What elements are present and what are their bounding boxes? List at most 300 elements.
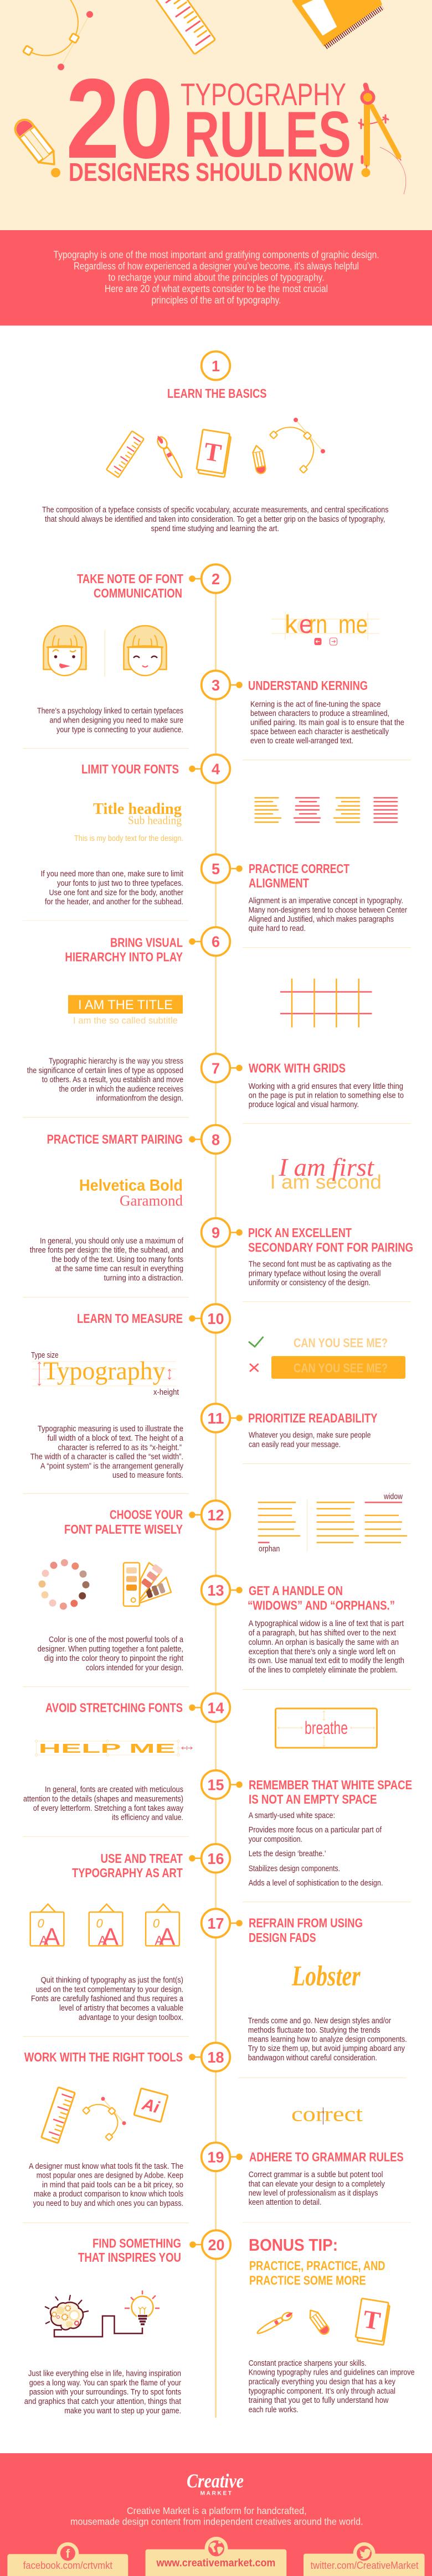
body text [249, 2359, 415, 2414]
body text [249, 1082, 404, 1109]
number badge 18 [189, 2043, 230, 2071]
body text: methods fluctuate too. Studying the trends [248, 2026, 380, 2035]
heading: REFRAIN FROM USING [249, 1916, 363, 1930]
body text [249, 2170, 385, 2207]
icon: framed type 3: A [159, 1923, 176, 1951]
body text: primary typeface without losing the overall [249, 1269, 381, 1279]
number badge 6: 6 [212, 933, 220, 951]
number badge 13: 13 [207, 1582, 224, 1599]
font sample: Title heading [93, 800, 182, 818]
number badge 12: 12 [207, 1507, 224, 1524]
body text: If you need more than one, make sure to limit [41, 869, 184, 879]
body text: and graphics that catch your attention, things that [24, 2397, 182, 2406]
measure diagram: x-height [153, 1388, 179, 1397]
panel: introduction band: to recharge your mind about the principles of typography. [109, 272, 325, 283]
number badge 14 [189, 1694, 230, 1722]
panel: rule 16 typography as art [23, 1844, 230, 2037]
body text: its own. Use manual text edit to modify the length [249, 1656, 404, 1665]
body text: A smartly-used white space: [249, 1811, 335, 1820]
body text: exception that there’s only a single word left on [249, 1647, 395, 1656]
breathe illustration [276, 1708, 377, 1748]
body text [31, 1976, 184, 2022]
body text: in mind that paid tools can be a bit pricey, so [42, 2180, 183, 2190]
heading: BONUS TIP: [249, 2235, 338, 2255]
body text [250, 699, 404, 746]
panel: rule 13 widows and orphans [202, 1492, 411, 1690]
colour wheel [39, 1559, 90, 1610]
measure diagram [31, 1351, 179, 1397]
heading: THAT INSPIRES YOU [78, 2250, 181, 2265]
card: facebook [7, 2542, 128, 2576]
body text [248, 2016, 407, 2063]
body text: and when designing you need to make sure [50, 716, 183, 725]
number badge 19: 19 [207, 2148, 224, 2165]
panel: rule 8 smart pairing [23, 1125, 230, 1297]
number badge 18: 18 [207, 2049, 224, 2066]
body text: the significance of certain lines of type as opposed [27, 1066, 183, 1076]
body text: at the same time can result in everything [55, 1264, 183, 1274]
body text: Color is one of the most powerful tools of a [49, 1635, 184, 1644]
widow and orphan diagram: widow [383, 1492, 403, 1502]
panel: rule 2 font communication [23, 564, 230, 749]
body text: Constant practice sharpens your skills. [249, 2359, 367, 2368]
icon: framed type 3: A [155, 1933, 163, 1949]
kerning illustration: rn [309, 610, 327, 638]
body text: attention to the details (shapes and measurements) [23, 1794, 183, 1804]
number badge 19 [202, 2143, 243, 2171]
pairing sample [270, 1153, 382, 1193]
body text: of the lines to completely eliminate the problem. [249, 1665, 398, 1675]
number badge 7: 7 [212, 1060, 220, 1077]
heading: GET A HANDLE ON [249, 1583, 343, 1598]
body text: most popular ones are designed by Adobe. Keep [37, 2171, 183, 2180]
body text: you need to buy and which ones you can bypass. [33, 2199, 183, 2208]
card: twitter: twitter.com/CreativeMarket [311, 2560, 419, 2571]
heading: LEARN TO MEASURE [77, 1311, 183, 1326]
body text: of a paragraph, but has shifted over to the next [249, 1628, 397, 1638]
heading: PRACTICE CORRECT [249, 861, 349, 876]
number badge 2: 2 [212, 570, 220, 588]
measure diagram: Type size [31, 1351, 59, 1360]
body text: spend time studying and learning the art. [151, 524, 279, 533]
icon: frowning face [43, 626, 86, 676]
body text: Correct grammar is a subtle but potent tool [249, 2170, 383, 2179]
body text: training that you get to fully understand how [249, 2396, 389, 2405]
body text: Fonts are carefully fashioned and thus requires a [31, 1994, 184, 2003]
body text: that can elevate your design to a completely [249, 2179, 385, 2189]
body text: Trends come and go. New design styles and/or [248, 2016, 391, 2026]
body text: column. An orphan is basically the same with an [249, 1638, 399, 1647]
readability sample: CAN YOU SEE ME? [294, 1336, 388, 1350]
card: website [146, 2537, 286, 2576]
number badge 12 [189, 1500, 230, 1529]
number badge 5 [202, 854, 243, 883]
card: website: www.creativemarket.com [156, 2557, 275, 2569]
body text [24, 2369, 182, 2416]
body text: Kerning is the act of fine-tuning the space [250, 699, 381, 709]
logo: MARKET [200, 2491, 232, 2496]
number badge 4 [189, 755, 230, 783]
body text: used to measure fonts. [112, 1471, 183, 1480]
body text: between characters to produce a streamlined, [250, 709, 389, 718]
body text: three fonts per design: the title, the subhead, and [30, 1245, 183, 1255]
heading: WORK WITH GRIDS [249, 1061, 346, 1076]
font sample: This is my body text for the design. [74, 834, 183, 843]
body text: for the header, and another for the subhead. [45, 897, 183, 907]
title: DESIGNERS SHOULD KNOW [69, 158, 353, 186]
heading [249, 1916, 363, 1945]
panel: introduction band: Regardless of how experienced a designer you’ve become, it’s always helpful [74, 261, 359, 272]
icon: framed type 2 [89, 1904, 122, 1951]
body text: space between each character is aesthetically [250, 727, 389, 736]
heading [72, 1851, 183, 1880]
widow and orphan diagram: orphan [259, 1544, 280, 1554]
body text: each rule works. [249, 2405, 299, 2414]
body text [249, 896, 407, 933]
panel: rule 15 white space [202, 1708, 412, 1902]
icon: type book: T [361, 2304, 382, 2335]
body text: designer. When putting together a font palette, [38, 1644, 183, 1654]
body text [30, 1424, 184, 1480]
heading: LIMIT YOUR FONTS [81, 762, 179, 776]
lobster font sample: Lobster [291, 1961, 361, 1992]
hierarchy sample: I am the so called subtitle [73, 1015, 178, 1026]
number badge 15 [202, 1770, 243, 1799]
title [66, 55, 353, 186]
subheading: PRACTICE, PRACTICE, AND [249, 2258, 385, 2273]
body text [38, 1635, 184, 1673]
panel: introduction band: Here are 20 of what experts consider to be the most crucial [105, 283, 328, 294]
icon: ruler [152, 0, 215, 54]
hierarchy sample: I AM THE TITLE [78, 998, 173, 1012]
body text: even to create well-arranged text. [250, 736, 353, 746]
body text [37, 706, 183, 735]
body text: turning into a distraction. [104, 1274, 183, 1283]
number badge 11 [202, 1404, 243, 1432]
body text: Use one font and size for the body, another [49, 888, 183, 897]
measure diagram: Typography [43, 1357, 166, 1385]
body text: to others. As a result, you establish and move [42, 1075, 183, 1084]
number badge 3: 3 [212, 677, 220, 694]
icon: framed type 3: 0 [153, 1917, 160, 1930]
body text: uniformity or consistency of the design. [249, 1278, 371, 1287]
heading: FONT PALETTE WISELY [64, 1522, 183, 1536]
icon: framed type 2: 0 [96, 1917, 103, 1930]
stretched text sample [35, 1740, 192, 1756]
number badge 16 [189, 1844, 230, 1873]
body text: typographic component. It’s only through actual [249, 2386, 395, 2396]
body text: full width of a block of text. The height of a [48, 1434, 184, 1443]
pairing sample [79, 1177, 183, 1209]
number badge 10: 10 [207, 1310, 224, 1327]
heading [249, 861, 349, 890]
number badge 6 [189, 927, 230, 955]
heading [78, 2236, 181, 2265]
panel: header [0, 0, 432, 230]
panel: introduction band [0, 230, 432, 325]
icon: type book [196, 429, 232, 477]
number badge 9: 9 [212, 1224, 220, 1242]
number badge 8 [189, 1125, 230, 1154]
number badge 1: 1 [212, 357, 220, 375]
number badge 15: 15 [207, 1777, 224, 1794]
icon: paintbrush [256, 2310, 295, 2336]
font sample [74, 800, 183, 843]
breathe illustration: breathe [305, 1718, 348, 1738]
icon: illustrator [134, 2088, 168, 2122]
readability sample: CAN YOU SEE ME? [294, 1361, 388, 1375]
icon: illustrator: Ai [140, 2095, 162, 2117]
panel: rule 20 inspiration [24, 2230, 230, 2416]
kerning illustration: e [296, 610, 311, 638]
icon: framed type 1 [30, 1904, 64, 1951]
body text [249, 1811, 383, 1888]
icon: pencil [12, 116, 60, 171]
heading [65, 935, 183, 964]
heading: USE AND TREAT [101, 1851, 183, 1866]
body text: A “point system” is the arrangement generally [40, 1461, 183, 1471]
kerning illustration: k [285, 610, 298, 638]
panel: introduction band: principles of the art of typography. [152, 294, 281, 305]
heading [249, 1778, 412, 1806]
panel: footer [0, 2453, 432, 2576]
pairing sample: Garamond [120, 1192, 183, 1209]
body text [41, 869, 184, 907]
pairing sample: I am first [278, 1153, 374, 1181]
body text: Alignment is an imperative concept in typography. [249, 896, 403, 905]
icon: framed type 1: A [39, 1933, 48, 1949]
kerning illustration: me [338, 610, 368, 638]
number badge 11: 11 [207, 1410, 224, 1427]
icon: paintbrush [155, 433, 185, 480]
card: twitter [304, 2542, 425, 2576]
number badge 3 [202, 671, 243, 699]
panel: rule 9 secondary font [202, 1153, 413, 1302]
panel: rule 1 learn the basics [42, 351, 389, 533]
body text: Working with a grid ensures that every little thing [249, 1082, 403, 1091]
body text: produce logical and visual harmony. [249, 1100, 359, 1109]
number badge 9 [202, 1218, 243, 1247]
panel: introduction band: Typography is one of the most important and gratifying components of graphic design. [53, 249, 379, 260]
kerning illustration [271, 610, 379, 645]
number badge 20: 20 [208, 2236, 225, 2253]
number badge 5: 5 [212, 860, 220, 877]
icon: framed type 2: A [102, 1923, 119, 1951]
panel: rule 7 work with grids [202, 979, 411, 1124]
body text [27, 1057, 183, 1103]
heading: PICK AN EXCELLENT [248, 1225, 352, 1240]
number badge 8: 8 [212, 1131, 220, 1148]
card: facebook: facebook.com/crtvmkt [23, 2560, 112, 2571]
body text: its efficiency and value. [112, 1812, 183, 1822]
body text [249, 1619, 404, 1675]
body text: of every letterform. Stretching a font takes away [33, 1804, 183, 1813]
widow and orphan diagram [258, 1492, 407, 1554]
body text: In general, fonts are created with meticulous [45, 1785, 183, 1794]
heading: CHOOSE YOUR [110, 1508, 183, 1522]
icon: type book: T [202, 437, 223, 468]
alignment icons [255, 798, 397, 822]
panel: rule 10 learn to measure [23, 1304, 230, 1494]
font sample: Sub heading [128, 814, 182, 827]
heading: PRIORITIZE READABILITY [248, 1411, 378, 1425]
card: facebook: f [66, 2547, 70, 2561]
number badge 14: 14 [207, 1699, 224, 1716]
body text: your fonts to just two to three typefaces. [57, 879, 183, 888]
heading: UNDERSTAND KERNING [248, 678, 368, 693]
body text: the body of the text. Using too many fonts [52, 1255, 183, 1264]
footer description [70, 2505, 363, 2527]
heading: IS NOT AN EMPTY SPACE [249, 1792, 377, 1806]
icon: compass [359, 85, 406, 194]
pairing sample: Helvetica Bold [79, 1177, 183, 1194]
heading [77, 572, 183, 600]
divider [104, 630, 105, 677]
readability sample [249, 1336, 405, 1379]
body text: character is referred to as its “x-height.” [58, 1443, 182, 1452]
body text [23, 1785, 183, 1822]
body text: A designer must know what tools fit the task. The [29, 2162, 183, 2171]
panel: rule 12 font palette [23, 1500, 230, 1687]
number badge 17 [202, 1909, 243, 1938]
number badge 13 [202, 1576, 243, 1604]
body text: The second font must be as captivating as the [249, 1260, 392, 1269]
footer description: Creative Market is a platform for handcrafted, [127, 2505, 307, 2516]
heading [248, 1583, 395, 1612]
heading: PRACTICE SMART PAIRING [47, 1132, 183, 1146]
icon: bezier curve [83, 2097, 126, 2141]
correct word sample: correct [291, 2102, 363, 2126]
heading: “WIDOWS” AND “ORPHANS.” [248, 1598, 395, 1612]
body text: Aligned and Justified, which makes paragraphs [249, 915, 394, 924]
body text: practically everything you design that has a key [249, 2377, 395, 2387]
subheading: PRACTICE SOME MORE [249, 2273, 366, 2288]
body text: Lets the design ‘breathe.’ [249, 1849, 326, 1858]
body text [29, 2162, 183, 2208]
icon: ruler [106, 431, 144, 477]
icon: bezier curve [270, 418, 325, 473]
body text [42, 505, 389, 533]
body text: Stabilizes design components. [249, 1864, 340, 1873]
body text [249, 1431, 371, 1450]
body text: Just like everything else in life, having inspiration [28, 2369, 181, 2378]
icon: pencil [251, 445, 266, 474]
body text: on the page is put in relation to something else to [249, 1091, 404, 1100]
body text: In general, you should only use a maximum of [40, 1237, 184, 1246]
body text: Whatever you design, make sure people [249, 1431, 371, 1440]
icon: bezier curve [23, 0, 93, 70]
body text: goes a long way. You can spark the flame of your [29, 2378, 181, 2388]
icon: framed type 1: A [44, 1923, 60, 1951]
icon: swatch fan [124, 1562, 171, 1606]
heading: BRING VISUAL [110, 935, 183, 949]
panel: rule 4 limit your fonts [23, 755, 230, 921]
heading: AVOID STRETCHING FONTS [45, 1701, 183, 1715]
heading: FIND SOMETHING [92, 2236, 181, 2250]
panel: rule 14 avoid stretching [23, 1694, 230, 1837]
number badge 1 [202, 351, 230, 380]
body text: your type is connecting to your audience. [56, 725, 183, 735]
panel: rule 17 design fads [202, 1909, 407, 2078]
body text: new level of professionalism as it displays [249, 2189, 378, 2198]
heading: WORK WITH THE RIGHT TOOLS [24, 2050, 183, 2064]
panel: rule 18 right tools [23, 2043, 230, 2223]
title: TYPOGRAPHY [181, 77, 346, 112]
body text [30, 1237, 184, 1283]
body text: make you want to step up your game. [64, 2406, 181, 2416]
body text: Provides more focus on a particular part of [249, 1825, 382, 1835]
panel: rule 3 understand kerning [202, 610, 411, 760]
body text: The width of a character is called the “set width”. [30, 1452, 183, 1461]
panel: rule 6 visual hierarchy [23, 927, 230, 1118]
number badge 2 [189, 564, 230, 593]
icon: framed type 1: 0 [38, 1917, 44, 1930]
body text: A typographical widow is a line of text that is part [249, 1619, 404, 1628]
number badge 16: 16 [207, 1850, 224, 1867]
heading: COMMUNICATION [94, 586, 182, 600]
timeline spine [215, 586, 217, 2418]
heading: TAKE NOTE OF FONT [77, 572, 183, 586]
icon: brain and light bulb [45, 2291, 160, 2337]
grid illustration [280, 979, 372, 1027]
icon: ruler [41, 2087, 75, 2143]
body text: keen attention to detail. [249, 2198, 321, 2207]
subheading [249, 2258, 385, 2288]
heading: ALIGNMENT [249, 876, 309, 890]
title: RULES [184, 98, 351, 170]
icon: framed type 2: A [98, 1933, 107, 1949]
body text: Typographic measuring is used to illustrate the [38, 1424, 183, 1434]
body text: Quit thinking of typography as just the font(s) [41, 1976, 183, 1985]
heading: TYPOGRAPHY AS ART [72, 1866, 183, 1880]
body text: passion with your surroundings. Try to spot fonts [29, 2387, 181, 2397]
body text: unified pairing. Its main goal is to ensure that the [250, 718, 404, 727]
panel: rule 19 grammar [202, 2102, 411, 2223]
icon: type book [355, 2298, 390, 2345]
body text: used on the text complementary to your design. [36, 1985, 183, 1994]
pairing sample: I am second [270, 1171, 382, 1193]
body text: Try to size them up, but avoid jumping aboard any [248, 2044, 405, 2053]
number badge 20 [189, 2230, 230, 2259]
stretched text sample: HELP ME [39, 1741, 176, 1756]
number badge 10 [189, 1304, 230, 1333]
icon: notebook [292, 0, 383, 47]
body text [249, 1260, 392, 1287]
body text: Adds a level of sophistication to the design. [249, 1878, 383, 1888]
title: 20 [66, 55, 173, 182]
logo: Creative [187, 2470, 244, 2492]
icon: pencil [307, 2308, 331, 2336]
body text: bandwagon without careful consideration. [248, 2053, 377, 2063]
body text: the order in which the audience receives [59, 1084, 183, 1094]
body text: level of artistry that becomes a valuable [59, 2003, 183, 2013]
body text: make a product comparison to know which tools [34, 2189, 183, 2199]
panel: bonus tip [249, 2235, 415, 2414]
icon: smiling face [124, 626, 166, 676]
panel: rule 11 prioritize readability [202, 1336, 411, 1464]
number badge 17: 17 [207, 1915, 224, 1932]
body text: dig into the color theory to pinpoint the right [44, 1654, 184, 1663]
footer description: mousemade design content from independent creatives around the world. [70, 2516, 363, 2527]
body text: There’s a psychology linked to certain typefaces [37, 706, 183, 716]
heading: HIERARCHY INTO PLAY [65, 949, 183, 964]
hierarchy sample [68, 995, 183, 1026]
body text: can easily read your message. [249, 1440, 341, 1450]
heading [64, 1508, 183, 1536]
body text: your composition. [249, 1835, 302, 1844]
number badge 7 [202, 1053, 243, 1082]
body text: quite hard to read. [249, 924, 306, 933]
